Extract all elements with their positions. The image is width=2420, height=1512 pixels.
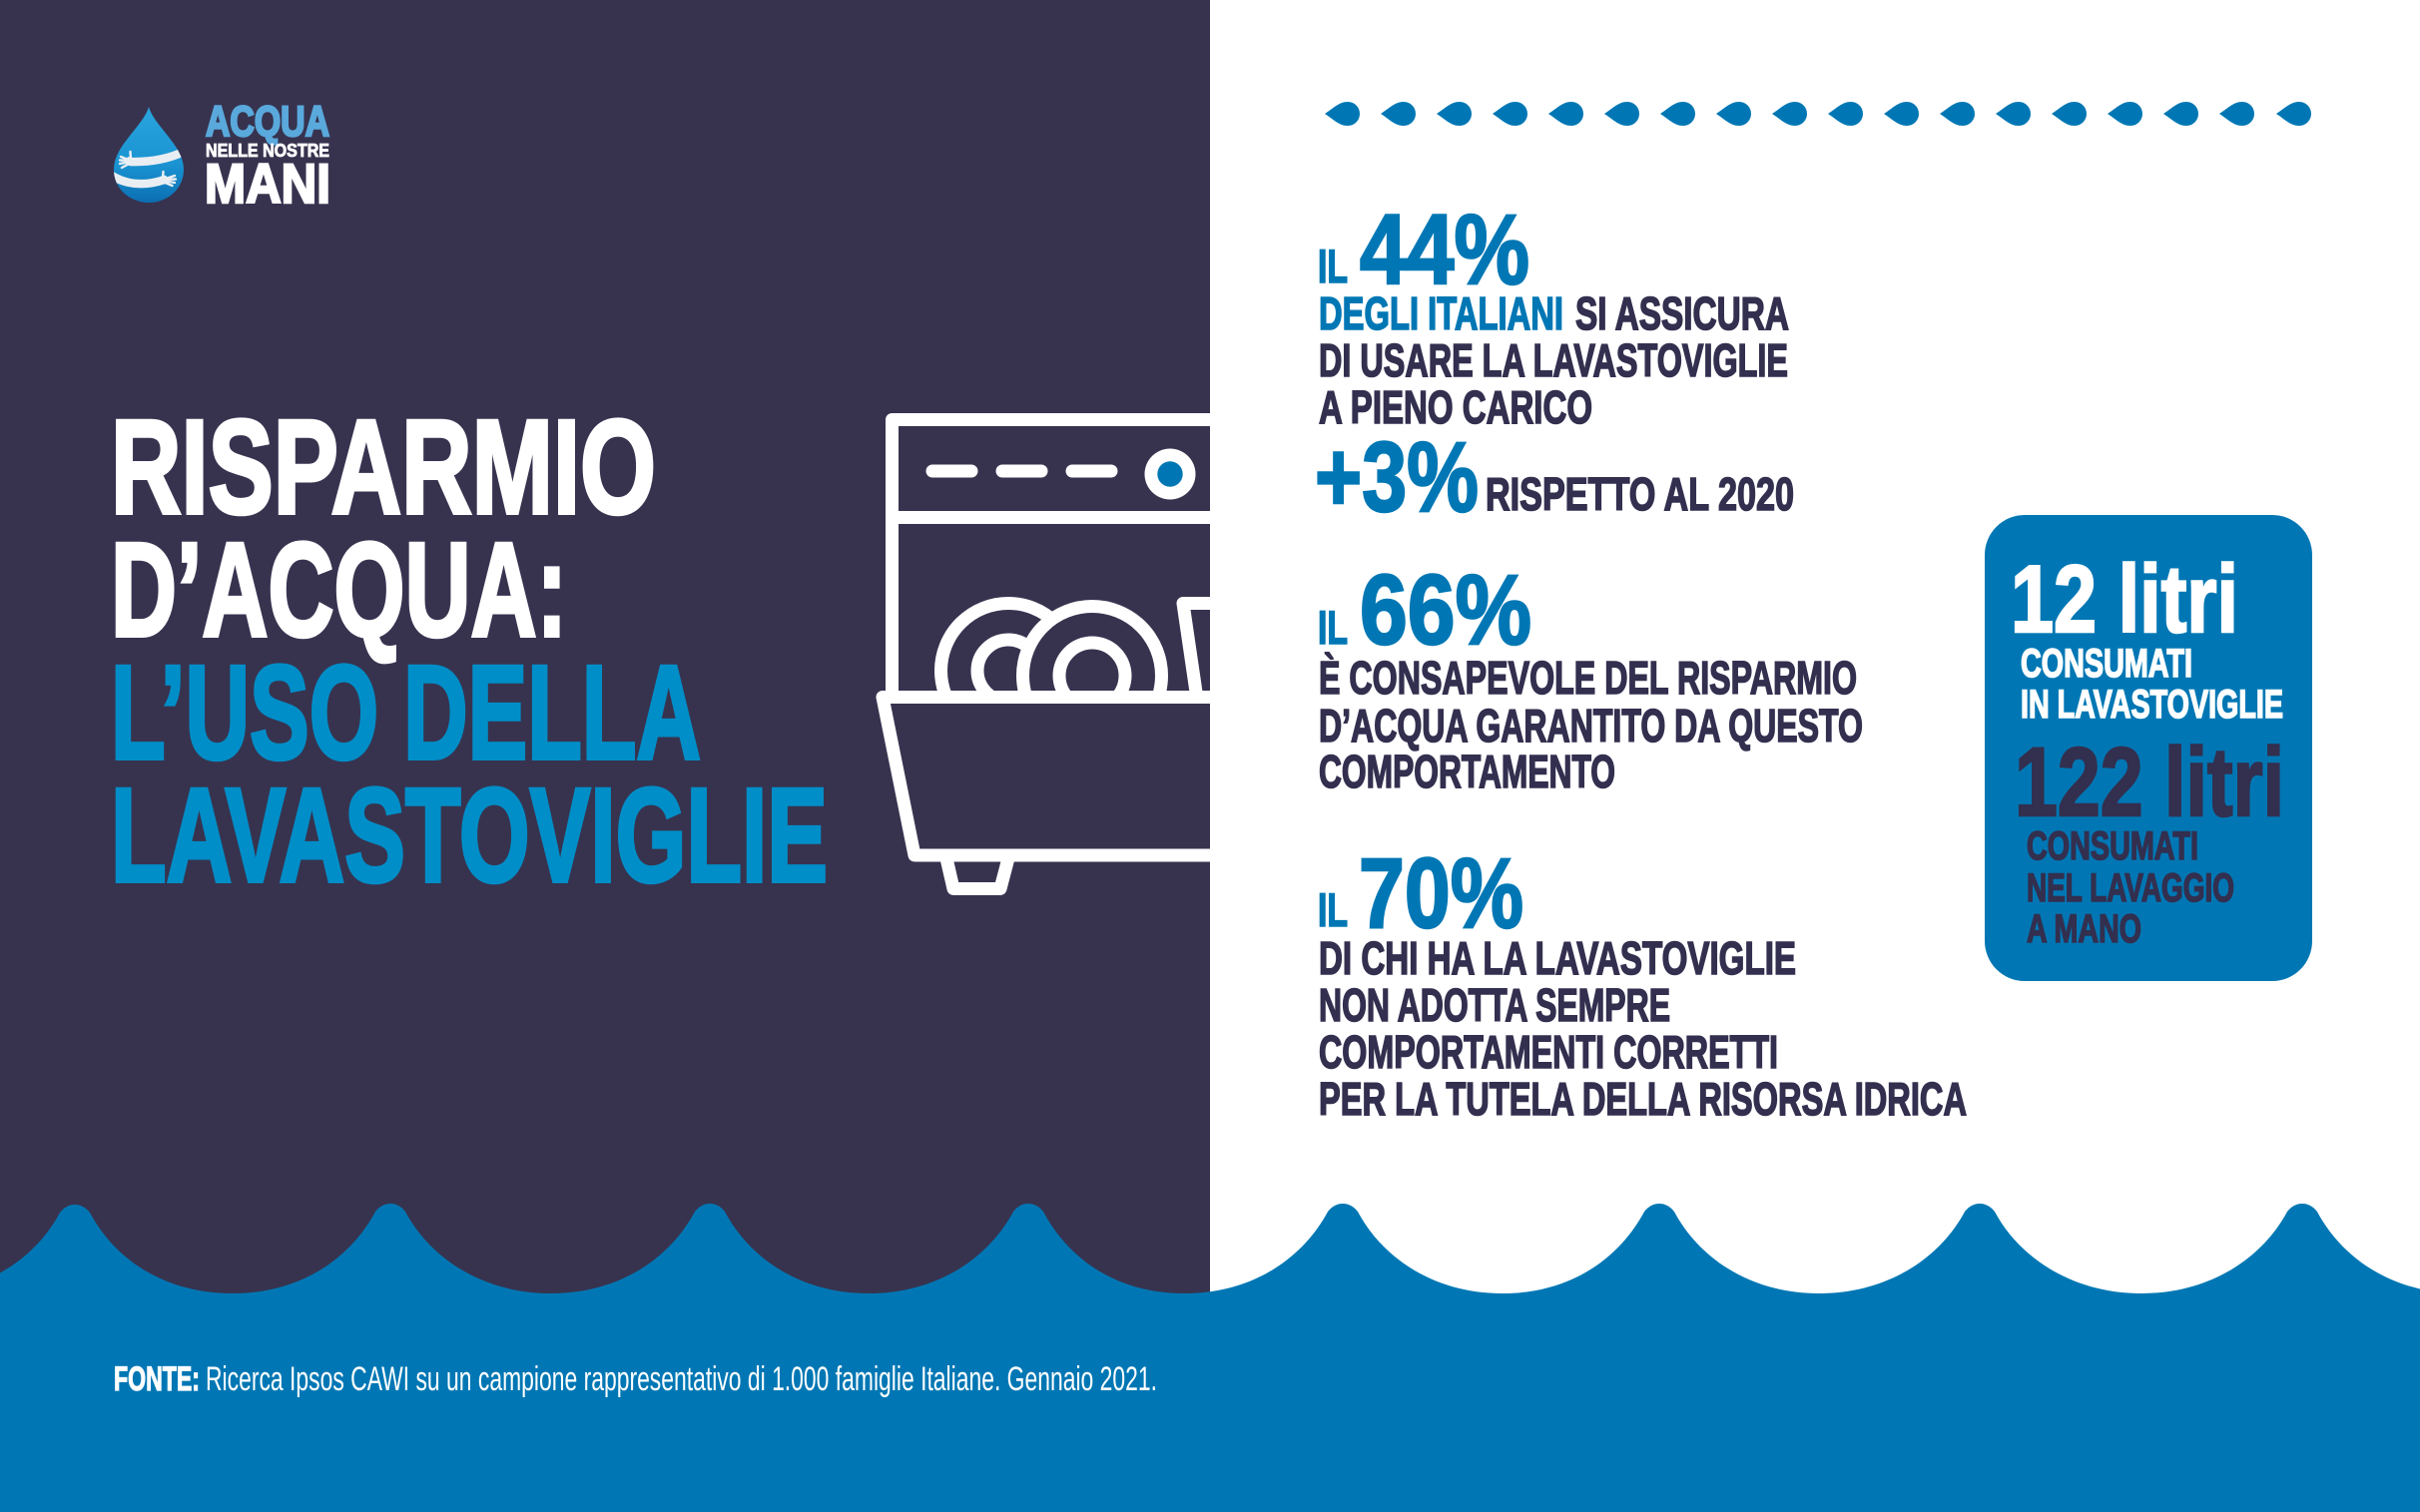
dishwasher consumption: IN LAVASTOVIGLIE — [2021, 683, 2283, 727]
hand wash consumption: CONSUMATI — [2027, 824, 2198, 868]
dishwasher consumption: 12 litri — [2011, 546, 2238, 653]
stat block: 66%: È CONSAPEVOLE DEL RISPARMIO — [1319, 652, 1857, 704]
panel: dark left background — [0, 0, 1210, 1307]
title: L’USO DELLA — [111, 639, 701, 787]
callout: water consumed comparison — [1985, 515, 2312, 981]
source note: Ricerca Ipsos CAWI su un campione rappresentativo di 1.000 famiglie Italiane. Gennaio 2021. — [206, 1360, 1157, 1398]
stat block: +3% rispetto al 2020: RISPETTO AL 2020 — [1486, 468, 1794, 520]
stat block: 44%: DI USARE LA LAVASTOVIGLIE — [1319, 334, 1788, 386]
stat block: 70%: COMPORTAMENTI CORRETTI — [1319, 1026, 1778, 1078]
stat block: 44%: DEGLI ITALIANI — [1319, 287, 1563, 339]
stat block: 66%: COMPORTAMENTO — [1319, 746, 1615, 797]
stat block: +3% rispetto al 2020: +3% — [1315, 421, 1479, 532]
stat block: 44%: A PIENO CARICO — [1319, 381, 1592, 433]
logo: Acqua nelle nostre mani — [114, 105, 329, 204]
stat block: 44%: 44% — [1360, 194, 1529, 304]
logo wordmark: MANI — [205, 152, 330, 215]
title: D’ACQUA: — [111, 516, 567, 665]
stat block: 66%: IL — [1318, 601, 1348, 654]
stat block: 70% — [1318, 837, 1967, 1125]
stat block: 66% — [1318, 554, 1863, 797]
logo wordmark: NELLE NOSTRE — [206, 141, 329, 161]
title: LAVASTOVIGLIE — [111, 761, 828, 910]
decorative row of water drops — [1325, 102, 2311, 126]
dishwasher consumption — [2011, 546, 2283, 727]
logo wordmark — [205, 98, 330, 215]
hand wash consumption: NEL LAVAGGIO — [2027, 866, 2234, 910]
title — [111, 393, 828, 910]
stat block: 70%: DI CHI HA LA LAVASTOVIGLIE — [1319, 932, 1796, 984]
stat block: 70%: NON ADOTTA SEMPRE — [1319, 979, 1670, 1031]
stat block: 44% — [1318, 194, 1789, 433]
wave footer band — [0, 1204, 2420, 1512]
hand wash consumption — [2015, 728, 2284, 951]
hand wash consumption: 122 litri — [2015, 728, 2284, 836]
stat block: 44%: SI ASSICURA — [1575, 287, 1789, 339]
source note — [114, 1360, 1157, 1398]
stat block: 44%: IL — [1318, 240, 1348, 292]
stat block: +3% rispetto al 2020 — [1315, 421, 1794, 532]
icon: dishwasher — [883, 419, 1228, 888]
hand wash consumption: A MANO — [2027, 907, 2141, 951]
icon: water drop hugged by arms — [112, 107, 186, 203]
stat block: 70%: IL — [1318, 883, 1348, 936]
stat block: 66%: D’ACQUA GARANTITO DA QUESTO — [1319, 700, 1863, 752]
stat block: 70%: 70% — [1359, 837, 1523, 948]
stat block: 70%: PER LA TUTELA DELLA RISORSA IDRICA — [1319, 1073, 1967, 1125]
logo wordmark: ACQUA — [206, 98, 329, 146]
source note: FONTE: — [114, 1360, 200, 1398]
stat block: 66%: 66% — [1360, 554, 1531, 665]
title: RISPARMIO — [111, 393, 656, 542]
dishwasher consumption: CONSUMATI — [2021, 642, 2192, 686]
